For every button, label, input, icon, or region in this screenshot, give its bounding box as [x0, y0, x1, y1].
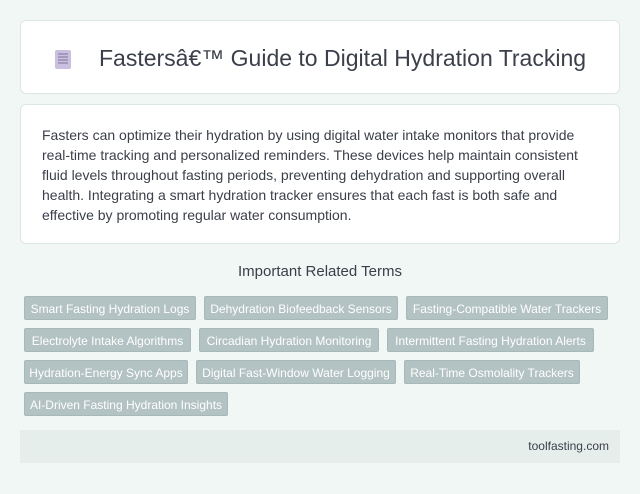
- tag: [196, 360, 396, 384]
- tag: [24, 296, 196, 320]
- tag: Real-Time Osmolality Trackers: [410, 366, 574, 380]
- title: Fastersâ€™ Guide to Digital Hydration Tracking: [99, 45, 586, 71]
- tag: [204, 296, 398, 320]
- tag: Hydration-Energy Sync Apps: [29, 366, 183, 380]
- tag: Electrolyte Intake Algorithms: [32, 334, 183, 348]
- tag: Intermittent Fasting Hydration Alerts: [395, 334, 586, 348]
- tag: [199, 328, 379, 352]
- description card: [20, 104, 620, 244]
- tag: Digital Fast-Window Water Logging: [202, 366, 390, 380]
- tag: [387, 328, 594, 352]
- header card: [20, 20, 620, 94]
- footer: [20, 430, 620, 463]
- tag: [24, 392, 228, 416]
- section heading: Important Related Terms: [238, 263, 402, 280]
- footer text: toolfasting.com: [528, 439, 609, 453]
- description text: Fasters can optimize their hydration by using digital water intake monitors that provide real-time tracking and personalized reminders. These devices help maintain consistent fluid levels throughout fasting periods, preventing dehydration and supporting overall health. Integrating a smart hydration tracker ensures that each fast is both safe and effective by promoting regular water consumption.: [42, 127, 578, 223]
- tag: [404, 360, 580, 384]
- tag: Circadian Hydration Monitoring: [207, 334, 371, 348]
- tag: Fasting-Compatible Water Trackers: [413, 302, 601, 316]
- tag: [24, 328, 191, 352]
- tag: Dehydration Biofeedback Sensors: [210, 302, 392, 316]
- tag: [406, 296, 608, 320]
- icon: receipt: [55, 50, 71, 69]
- tag: AI-Driven Fasting Hydration Insights: [30, 398, 222, 412]
- tag: Smart Fasting Hydration Logs: [31, 302, 189, 316]
- tag: [24, 360, 188, 384]
